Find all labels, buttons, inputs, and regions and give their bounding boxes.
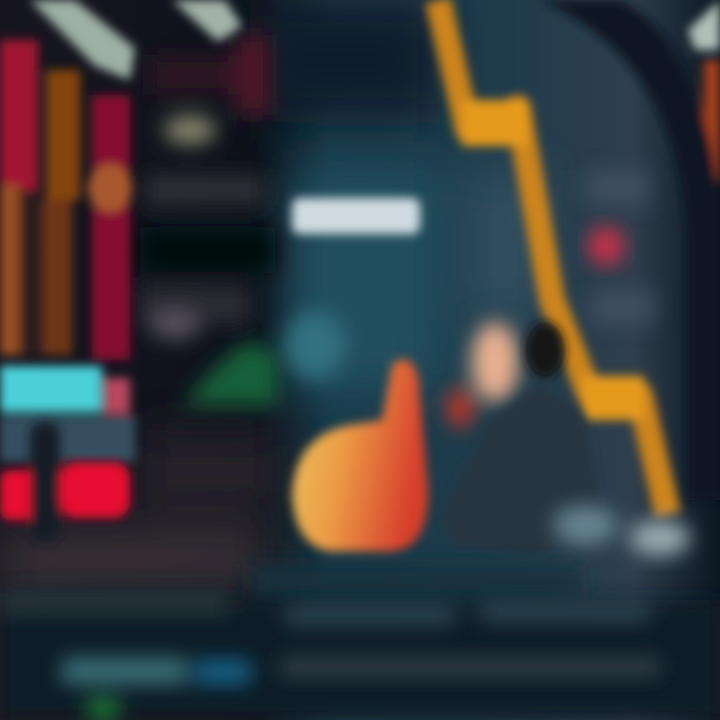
callout: cyan banner <box>0 366 135 462</box>
heading: blurred title <box>292 198 420 234</box>
panel: teal centre glow <box>0 0 540 590</box>
icon: red signal lights with dark figure <box>0 422 130 542</box>
chart: green area <box>182 342 278 405</box>
icon: flame hand <box>292 359 428 552</box>
text block: blurred footer lines <box>0 590 660 676</box>
panel: left dark shelves <box>140 35 275 340</box>
icon: top-right corner detail <box>540 0 720 500</box>
icon: pink marker <box>588 226 624 266</box>
arrow: falling orange line <box>438 0 668 515</box>
icon: knee highlights <box>553 505 690 556</box>
icon: glowing light <box>446 322 519 428</box>
text block: bottom-left teal label <box>62 658 251 720</box>
panel: right grey chart area <box>585 170 655 325</box>
panel: bottom dark footer <box>0 565 720 720</box>
chart: red and orange candlestick bars <box>0 40 132 360</box>
icon: top-left white diagonal bands <box>30 0 242 80</box>
icon: seated person <box>440 322 600 555</box>
panel: teal centre shape <box>285 311 345 379</box>
